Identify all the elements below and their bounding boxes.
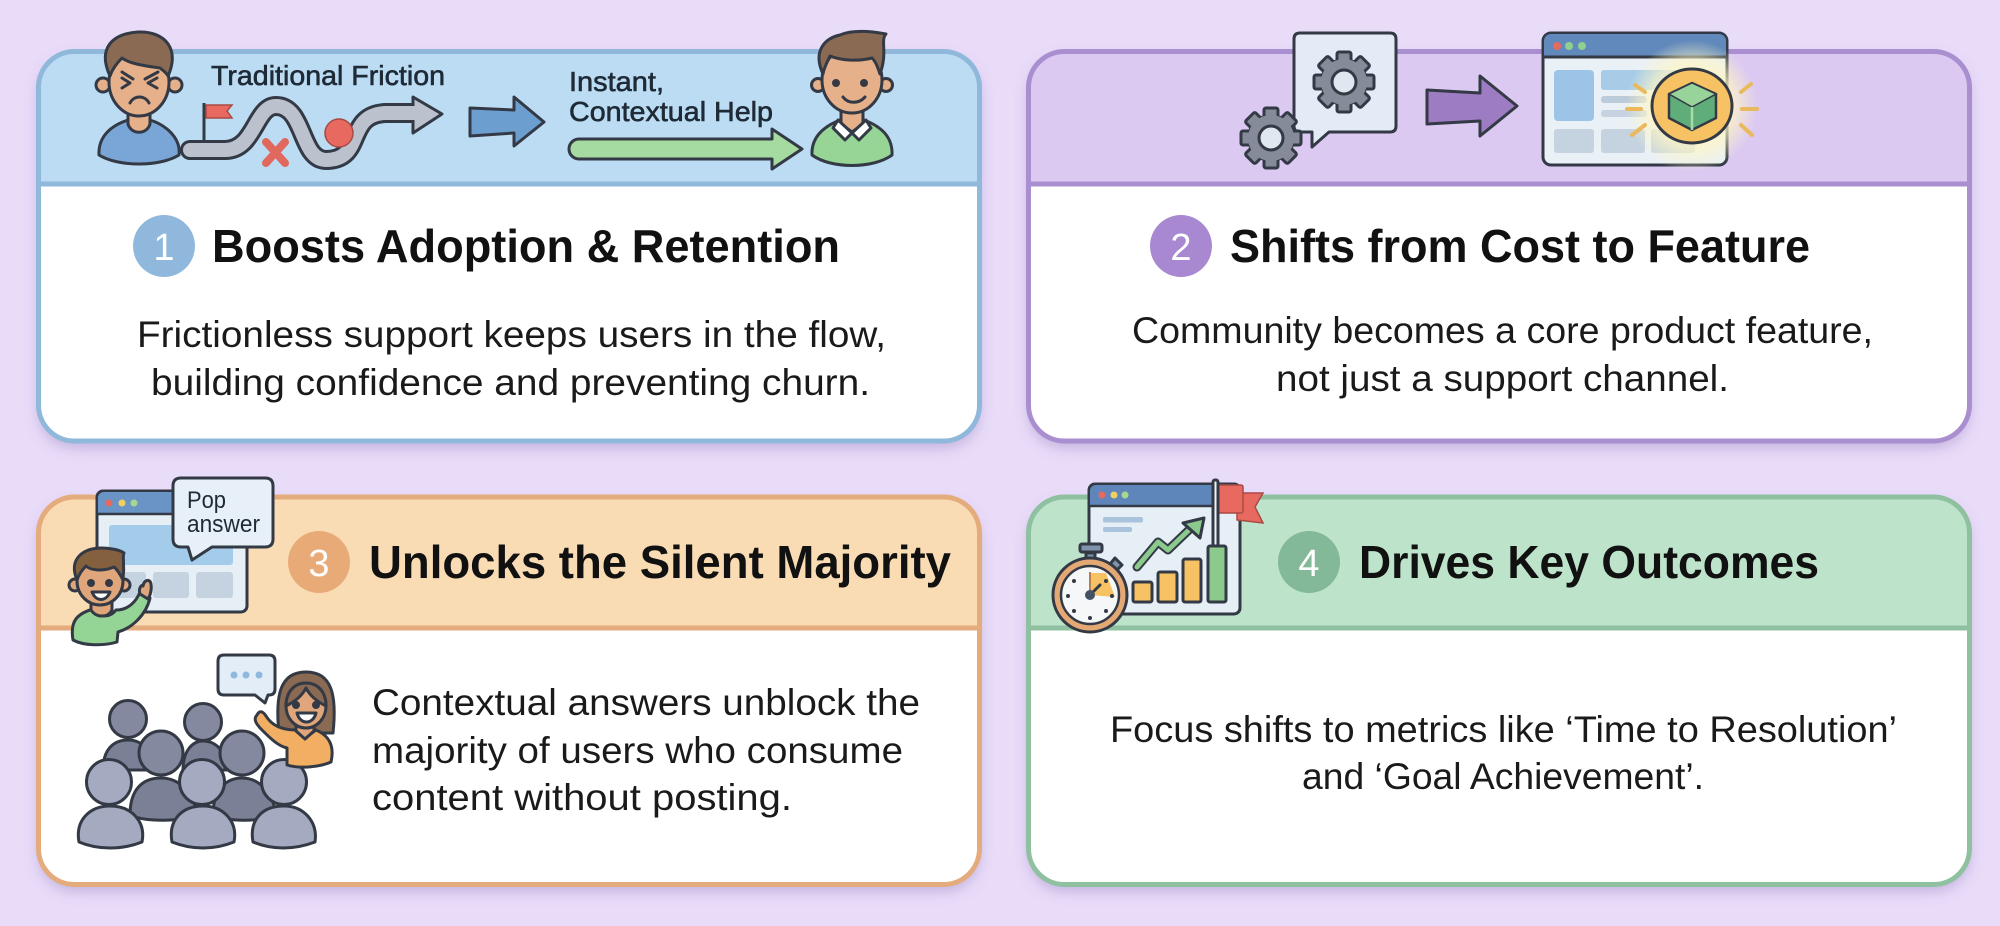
icon: happy user (812, 32, 892, 166)
number badge 3: 3 (308, 543, 330, 585)
callout: pop answer: answer (187, 511, 260, 538)
panel 4 card (1028, 497, 1970, 884)
label: instant contextual help (569, 66, 773, 127)
body text 2: not just a support channel. (1276, 358, 1729, 399)
heading: drives key outcomes: Drives Key Outcomes (1359, 536, 1819, 588)
body text 3: majority of users who consume (372, 730, 903, 771)
icon: winding friction path (190, 97, 442, 163)
icon: browser window with glowing feature (1543, 33, 1758, 172)
number badge 4 (1278, 531, 1340, 593)
body text 1 (137, 314, 886, 403)
panel: boosts adoption and retention (38, 32, 980, 441)
heading: unlocks the silent majority: Unlocks the Silent Majority (369, 536, 951, 588)
number badge 4: 4 (1298, 543, 1320, 585)
panel 2 border (1028, 52, 1970, 441)
panel 4 border (1028, 497, 1970, 884)
body text 4: Focus shifts to metrics like ‘Time to Resolution’ (1110, 709, 1897, 750)
panel: unlocks the silent majority (38, 478, 980, 884)
label: instant contextual help: Instant, (569, 66, 664, 97)
number badge 3 (288, 531, 350, 593)
body text 3: content without posting. (372, 777, 792, 818)
icon: small gear (1241, 108, 1301, 168)
body text 3 (372, 682, 920, 818)
panel 3 border (38, 497, 980, 884)
number badge 1 (133, 215, 195, 277)
label: traditional friction: Traditional Friction (211, 60, 445, 91)
icon: waving user (69, 548, 151, 645)
number badge 1: 1 (153, 227, 175, 269)
icon: silent crowd (78, 700, 315, 848)
panel 3 header band (38, 497, 980, 627)
callout: pop answer: Pop (187, 487, 226, 514)
body text 4 (1110, 709, 1897, 797)
panel 1 header band (38, 52, 980, 183)
icon: frustrated user (96, 32, 182, 164)
panel: shifts from cost to feature (1028, 33, 1970, 441)
body text 2: Community becomes a core product feature, (1132, 310, 1873, 351)
arrow: blue transition (470, 97, 544, 146)
icon: stopwatch (1053, 544, 1127, 632)
heading: shifts from cost to feature: Shifts from Cost to Feature (1230, 220, 1810, 272)
panel 1 border (38, 52, 980, 441)
icon: browser window (97, 491, 247, 612)
icon: browser with rising chart and flag (1089, 480, 1263, 614)
label: instant contextual help: Contextual Help (569, 96, 773, 127)
arrow: green direct path (569, 129, 802, 169)
body text 2 (1132, 310, 1873, 399)
panel 3 card (38, 497, 980, 884)
callout: pop answer (173, 478, 273, 560)
arrow: purple transition (1427, 76, 1517, 136)
number badge 2: 2 (1170, 227, 1192, 269)
panel: drives key outcomes (1028, 480, 1970, 884)
body text 1: building confidence and preventing churn. (151, 362, 870, 403)
body text 3: Contextual answers unblock the (372, 682, 920, 723)
number badge 2 (1150, 215, 1212, 277)
body text 1: Frictionless support keeps users in the flow, (137, 314, 886, 355)
icon: speech bubble with gear (1294, 33, 1396, 147)
panel 2 header band (1028, 52, 1970, 183)
panel 2 card (1028, 52, 1970, 441)
panel 1 card (38, 52, 980, 441)
body text 4: and ‘Goal Achievement’. (1302, 756, 1704, 797)
panel 4 header band (1028, 497, 1970, 627)
heading: boosts adoption and retention: Boosts Adoption & Retention (212, 220, 840, 272)
icon: speaking woman with bubble (218, 655, 334, 767)
